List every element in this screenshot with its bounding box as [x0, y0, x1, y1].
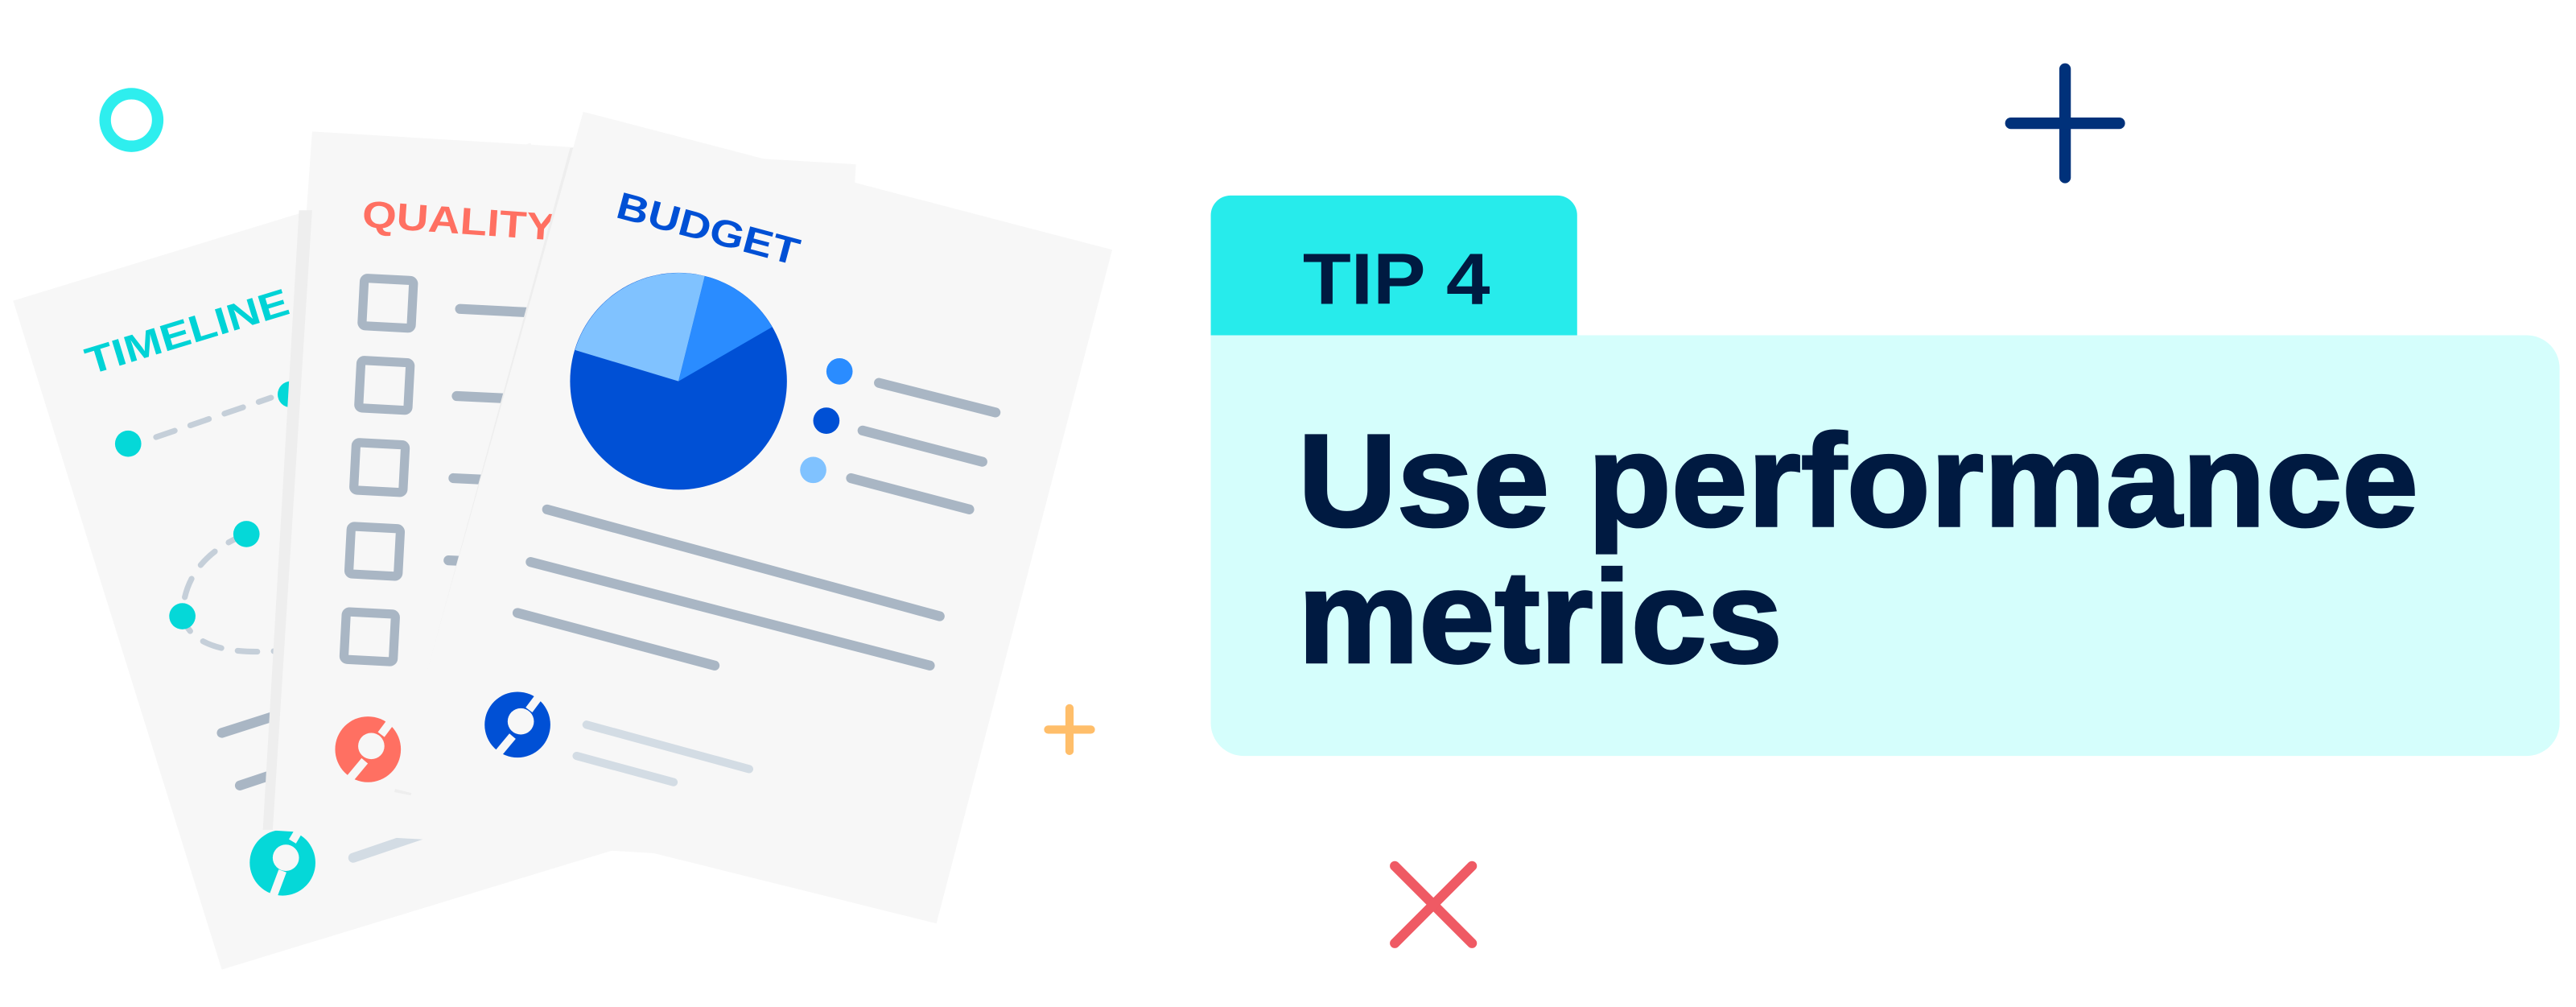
icon: orange plus — [1048, 708, 1091, 751]
legend — [800, 358, 995, 510]
title text: metrics — [1298, 543, 1783, 691]
title text: Use performance — [1298, 407, 2418, 554]
paper: timeline — [13, 143, 740, 969]
checklist — [344, 278, 414, 662]
tab: TIP 4 — [1211, 196, 1577, 335]
heading: QUALITY: QUALITY — [361, 192, 557, 248]
pie chart — [570, 273, 787, 489]
timeline dots — [115, 382, 304, 629]
timeline dashed path — [156, 398, 279, 652]
icon: cyan ring — [105, 93, 158, 147]
paper: quality — [263, 131, 856, 863]
icon: red x — [1395, 866, 1472, 943]
icon: salmon wrench — [335, 716, 401, 782]
text lines — [517, 510, 940, 666]
panel: title — [1211, 335, 2560, 756]
heading: TIMELINE: TIMELINE — [80, 280, 294, 382]
icon: navy plus — [2011, 69, 2119, 177]
heading: BUDGET: BUDGET — [612, 184, 805, 273]
tab: TIP 4: TIP 4 — [1303, 240, 1490, 320]
paper: budget — [394, 112, 1112, 923]
icon: teal wrench — [249, 825, 315, 898]
icon: blue wrench — [484, 691, 550, 757]
